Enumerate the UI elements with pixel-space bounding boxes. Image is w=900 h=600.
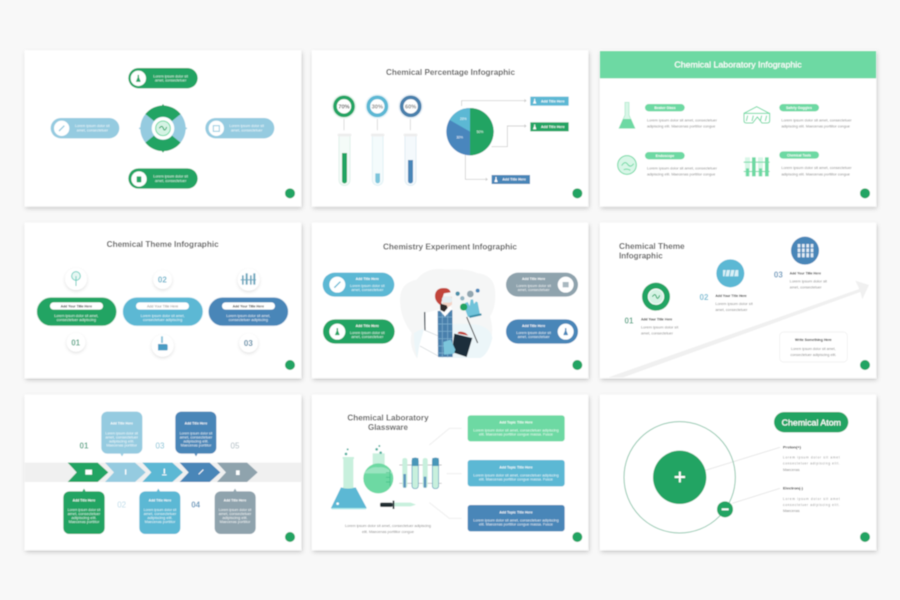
card 01: Maecenas porttitor: [69, 520, 99, 524]
step 01: amet, consectetuer: [641, 332, 673, 336]
title: Chemical Theme: [619, 241, 685, 251]
illustration: scientist: [400, 269, 495, 358]
conical flask: [331, 448, 367, 509]
pill: light blue: consectetuer adipiscing: [143, 318, 183, 322]
label: middle: Add Title Here: [541, 125, 565, 129]
proton text: Proton(+): [783, 445, 801, 449]
right pill: amet, consectetuer: [231, 128, 262, 132]
proton text: consectetuer adipiscing elit.: [783, 462, 840, 466]
step 01: [625, 283, 678, 336]
right pill: Lorem ipsum dolor sit: [229, 124, 264, 128]
card 04: adipiscing elit.: [183, 439, 209, 443]
chevron 4: [180, 463, 220, 482]
box 2: elit. Maecenas porttitor congue massa. Fusce: [479, 477, 553, 481]
proton text: Lorem ipsum dolor sit amet: [783, 456, 840, 460]
test tubes: [399, 458, 442, 489]
item: safety goggles: adipiscing elit. Maecenas porttitor congue: [781, 125, 850, 129]
proton text: [783, 445, 840, 472]
item: chemical tools: adipiscing elit. Maecenas porttitor congue: [781, 172, 850, 176]
item: microscope: Lorem ipsum dolor sit amet, consectetuer: [647, 167, 717, 171]
panel: chemistry experiment: [312, 223, 588, 378]
title pill: Chemical Atom: [782, 417, 841, 427]
pill: light blue: Add Your Title Here: [147, 304, 179, 308]
gauge 70%: [332, 94, 356, 119]
pill: green: Add Your Title Here: [61, 304, 92, 308]
pill: green: consectetuer adipiscing: [57, 318, 96, 322]
step 01: Add Your Title Here: [641, 318, 672, 322]
pill: light blue: Add Title Here: [356, 277, 379, 281]
box 2: [468, 460, 565, 486]
panel: chemical laboratory: [600, 50, 876, 206]
page number: [860, 532, 870, 542]
page number: [572, 360, 582, 370]
page number: [860, 188, 870, 198]
icon: petri dish: [618, 156, 636, 174]
step 03: Lorem ipsum dolor sit: [790, 280, 827, 284]
step 02: amet, consectetuer: [715, 308, 747, 312]
item: microscope: [645, 152, 717, 177]
page number: [285, 188, 295, 198]
card 04: Maecenas porttitor: [181, 443, 211, 447]
pill: light blue: [323, 273, 394, 297]
panel: cycle slide: [25, 50, 301, 206]
panel: laboratory glassware: [312, 395, 588, 550]
box 1: [468, 415, 565, 441]
card 05: amet, consectetuer: [219, 512, 251, 516]
icon badge: rack: [238, 269, 260, 291]
step 03: 03: [774, 270, 783, 279]
title: Glassware: [368, 422, 408, 432]
step numbers: 04: [191, 500, 201, 509]
card 01: adipiscing elit.: [71, 516, 97, 520]
pill: light blue: amet, consectetuer: [351, 288, 383, 292]
pill: blue: [506, 319, 578, 344]
card 05: adipiscing elit.: [222, 516, 248, 520]
note box: [780, 332, 847, 362]
step 02: Lorem ipsum dolor sit: [715, 302, 753, 306]
step 03: Add Your Title Here: [790, 272, 821, 276]
pill: blue: [208, 297, 288, 326]
page number: [860, 360, 870, 370]
box 2: Lorem ipsum dolor sit amet, consectetuer adipiscing: [473, 473, 559, 477]
bottom pill: Lorem ipsum dolor sit: [153, 175, 188, 179]
box 1: Lorem ipsum dolor sit amet, consectetuer adipiscing: [473, 429, 559, 433]
page number: [572, 188, 582, 198]
panel: process chevrons: [25, 395, 301, 550]
leader lines: [701, 447, 780, 503]
panel: chemical percentage: [312, 50, 588, 206]
left pill: amet, consectetuer: [77, 128, 108, 132]
panel: chemical theme growth: [600, 223, 876, 378]
icon: tube rack: [744, 157, 770, 176]
card 04: Add Title Here: [185, 421, 207, 425]
card 02: Lorem ipsum dolor sit: [105, 431, 138, 435]
title: Infographic: [619, 251, 663, 261]
gauge 60%: 60%: [405, 105, 416, 111]
card 04: Lorem ipsum dolor sit: [180, 431, 212, 435]
top pill: amet, consectetuer: [155, 79, 186, 83]
card 03: adipiscing elit.: [147, 516, 173, 520]
step 01: Lorem ipsum dolor sit: [641, 326, 678, 330]
card 03: [139, 489, 180, 534]
card 02: Add Title Here: [110, 421, 133, 425]
box 2: Add Topic Title Here: [499, 465, 533, 469]
top pill: Lorem ipsum dolor sit: [153, 74, 188, 78]
chevron 5: [217, 463, 258, 482]
number badge: 01: [67, 333, 85, 352]
pill: green: Lorem ipsum dolor sit: [350, 331, 385, 335]
right pill: [205, 118, 274, 138]
card 01: Lorem ipsum dolor sit: [68, 508, 100, 512]
box 1: Add Topic Title Here: [499, 421, 533, 425]
pill: green: [37, 297, 117, 326]
step 02: Add Your Title Here: [715, 294, 747, 298]
left pill: [51, 118, 119, 138]
card 01: [63, 489, 105, 534]
box 3: Lorem ipsum dolor sit amet, consectetuer adipiscing: [473, 518, 559, 522]
pill: gray: Add Title Here: [522, 277, 545, 281]
pie chart: 50%: [477, 130, 483, 134]
note box: Lorem ipsum dolor sit amet,: [791, 347, 836, 351]
pill: blue: Lorem ipsum dolor sit: [516, 331, 551, 335]
number badge: 03: 03: [244, 339, 253, 348]
test tube 1: [338, 119, 351, 185]
item: beaker glass: [645, 104, 717, 129]
item: beaker glass: Beaker Glass: [654, 106, 676, 110]
card 02: adipiscing elit.: [109, 439, 134, 443]
top pill: [128, 68, 198, 88]
pie chart: 20%: [460, 117, 467, 121]
left pill: Lorem ipsum dolor sit: [75, 124, 110, 128]
step 02: [700, 259, 753, 312]
step 03: [774, 237, 827, 290]
title: [347, 413, 429, 432]
item: safety goggles: Safety Goggles: [786, 106, 812, 110]
number badge: 01: 01: [71, 338, 81, 347]
step 03: amet, consectetuer: [790, 286, 822, 290]
pill: green: Lorem ipsum dolor sit amet,: [54, 314, 98, 318]
pill: light blue: Lorem ipsum dolor sit: [350, 284, 385, 288]
electron text: Lorem ipsum dolor sit amet: [783, 497, 840, 501]
pill: gray: [506, 273, 578, 297]
card 03: Maecenas porttitor: [145, 520, 175, 524]
chevron 3: [142, 463, 183, 482]
card 05: Maecenas porttitor: [220, 520, 250, 524]
caption: [345, 524, 431, 534]
card 03: Add Title Here: [149, 498, 171, 502]
card 02: Maecenas porttitor: [106, 443, 137, 447]
label: middle: [530, 122, 569, 131]
step numbers: 01: [80, 441, 89, 450]
number badge: 02: 02: [158, 276, 167, 285]
pill: green: [323, 319, 395, 344]
title: Chemical Theme Infographic: [107, 239, 219, 249]
electron text: [783, 487, 840, 513]
number badge: 02: [153, 270, 172, 289]
test tube 2: [371, 119, 384, 185]
electron text: Maecenas: [783, 509, 800, 513]
title: [619, 241, 685, 261]
label: top: [530, 97, 569, 106]
card 05: [215, 489, 256, 534]
electron text: consectetuer adipiscing elit.: [783, 503, 840, 507]
header band: [600, 51, 876, 78]
pill: blue: Add Title Here: [522, 324, 545, 328]
title: Chemistry Experiment Infographic: [383, 242, 517, 252]
pill: gray: Lorem ipsum dolor sit: [516, 284, 551, 288]
bottom pill: amet, consectetuer: [155, 179, 186, 183]
pill: green: amet, consectetuer: [351, 335, 383, 339]
pill: blue: amet, consectetuer: [518, 335, 550, 339]
page number: [285, 532, 295, 542]
label: top: Add Title Here: [541, 99, 565, 103]
item: chemical tools: Lorem ipsum dolor sit amet, consectetuer: [781, 166, 852, 170]
gauge 30%: [365, 94, 390, 119]
box 1: elit. Maecenas porttitor congue massa. Fusce: [479, 433, 553, 437]
item: chemical tools: [779, 151, 852, 176]
label: bottom: Add Title Here: [502, 178, 526, 182]
step numbers: 03: [156, 441, 165, 450]
pill: blue: consectetuer adipiscing: [229, 318, 268, 322]
growth arrow: [608, 281, 869, 377]
card 01: Add Title Here: [73, 498, 95, 502]
caption: Lorem ipsum dolor sit amet, consectetuer adipiscing: [345, 524, 431, 528]
card 05: Add Title Here: [224, 498, 246, 502]
pill: gray: amet, consectetuer: [518, 288, 550, 292]
panel: chemical theme pills: [25, 223, 301, 378]
title: Chemical Laboratory Infographic: [674, 60, 802, 70]
item: microscope: adipiscing elit. Maecenas porttitor congue: [647, 173, 716, 177]
box 3: Add Topic Title Here: [499, 510, 533, 514]
label: bottom: [492, 175, 530, 184]
note box: consectetuer adipiscing elit.: [790, 353, 836, 357]
title pill: [774, 412, 848, 432]
card 05: Lorem ipsum dolor sit: [219, 508, 251, 512]
proton text: Maecenas: [783, 468, 800, 472]
band: [25, 463, 301, 482]
card 02: amet, consectetuer: [105, 435, 138, 439]
pill: green: Add Title Here: [356, 324, 379, 328]
item: microscope: Endoscope: [656, 154, 674, 158]
pie chart: [446, 108, 494, 155]
pill: light blue: [123, 297, 203, 326]
box 3: elit. Maecenas porttitor congue massa. Fusce: [479, 522, 553, 526]
card 04: [175, 412, 216, 456]
dropper: [380, 501, 416, 509]
electron text: Electron(-): [783, 487, 803, 491]
gauge 60%: [398, 94, 423, 119]
icon badge: tree: [65, 268, 87, 290]
step numbers: [80, 441, 240, 509]
step numbers: 02: [117, 500, 127, 509]
step 02: 02: [700, 293, 709, 302]
gauge 30%: 30%: [372, 105, 383, 111]
atom: [624, 422, 735, 533]
item: safety goggles: [779, 104, 852, 129]
page number: [572, 532, 582, 542]
caption: elit. Maecenas porttitor congue: [362, 530, 414, 534]
card 03: Lorem ipsum dolor sit: [144, 508, 176, 512]
item: chemical tools: Chemical Tools: [787, 153, 811, 157]
page number: [285, 360, 295, 370]
box 3: [468, 505, 565, 531]
icon badge: thumb: [152, 335, 174, 357]
title: Chemical Laboratory: [347, 413, 429, 423]
pill: blue: Add Your Title Here: [233, 304, 264, 308]
round flask: [363, 445, 393, 493]
item: safety goggles: Lorem ipsum dolor sit amet, consectetuer: [781, 118, 852, 122]
pill: blue: Lorem ipsum dolor sit amet,: [226, 314, 270, 318]
item: beaker glass: adipiscing elit. Maecenas porttitor congue: [647, 125, 716, 129]
title: Chemical Percentage Infographic: [386, 67, 515, 77]
card 04: amet, consectetuer: [180, 435, 212, 439]
chevron 1: [68, 463, 108, 482]
bottom pill: [128, 168, 198, 189]
leader arrows: [462, 99, 526, 181]
icon: flask: [619, 102, 635, 128]
central wheel: [139, 104, 187, 153]
icon: goggles: [744, 107, 770, 123]
panel: chemical atom: [600, 395, 876, 550]
pill: light blue: Lorem ipsum dolor sit amet,: [141, 314, 185, 318]
chevron 2: [105, 463, 146, 482]
item: beaker glass: Lorem ipsum dolor sit amet, consectetuer: [647, 118, 717, 122]
step 01: 01: [625, 316, 634, 325]
card 01: amet, consectetuer: [68, 512, 100, 516]
pie chart: 30%: [456, 136, 463, 140]
note box: Write Something Here: [795, 338, 832, 342]
card 03: amet, consectetuer: [144, 512, 176, 516]
test tube 3: [404, 119, 417, 185]
number badge: 03: [239, 334, 258, 352]
gauge 70%: 70%: [338, 105, 350, 111]
step numbers: 05: [231, 441, 240, 450]
card 02: [101, 412, 142, 456]
leader lines: [429, 428, 462, 518]
